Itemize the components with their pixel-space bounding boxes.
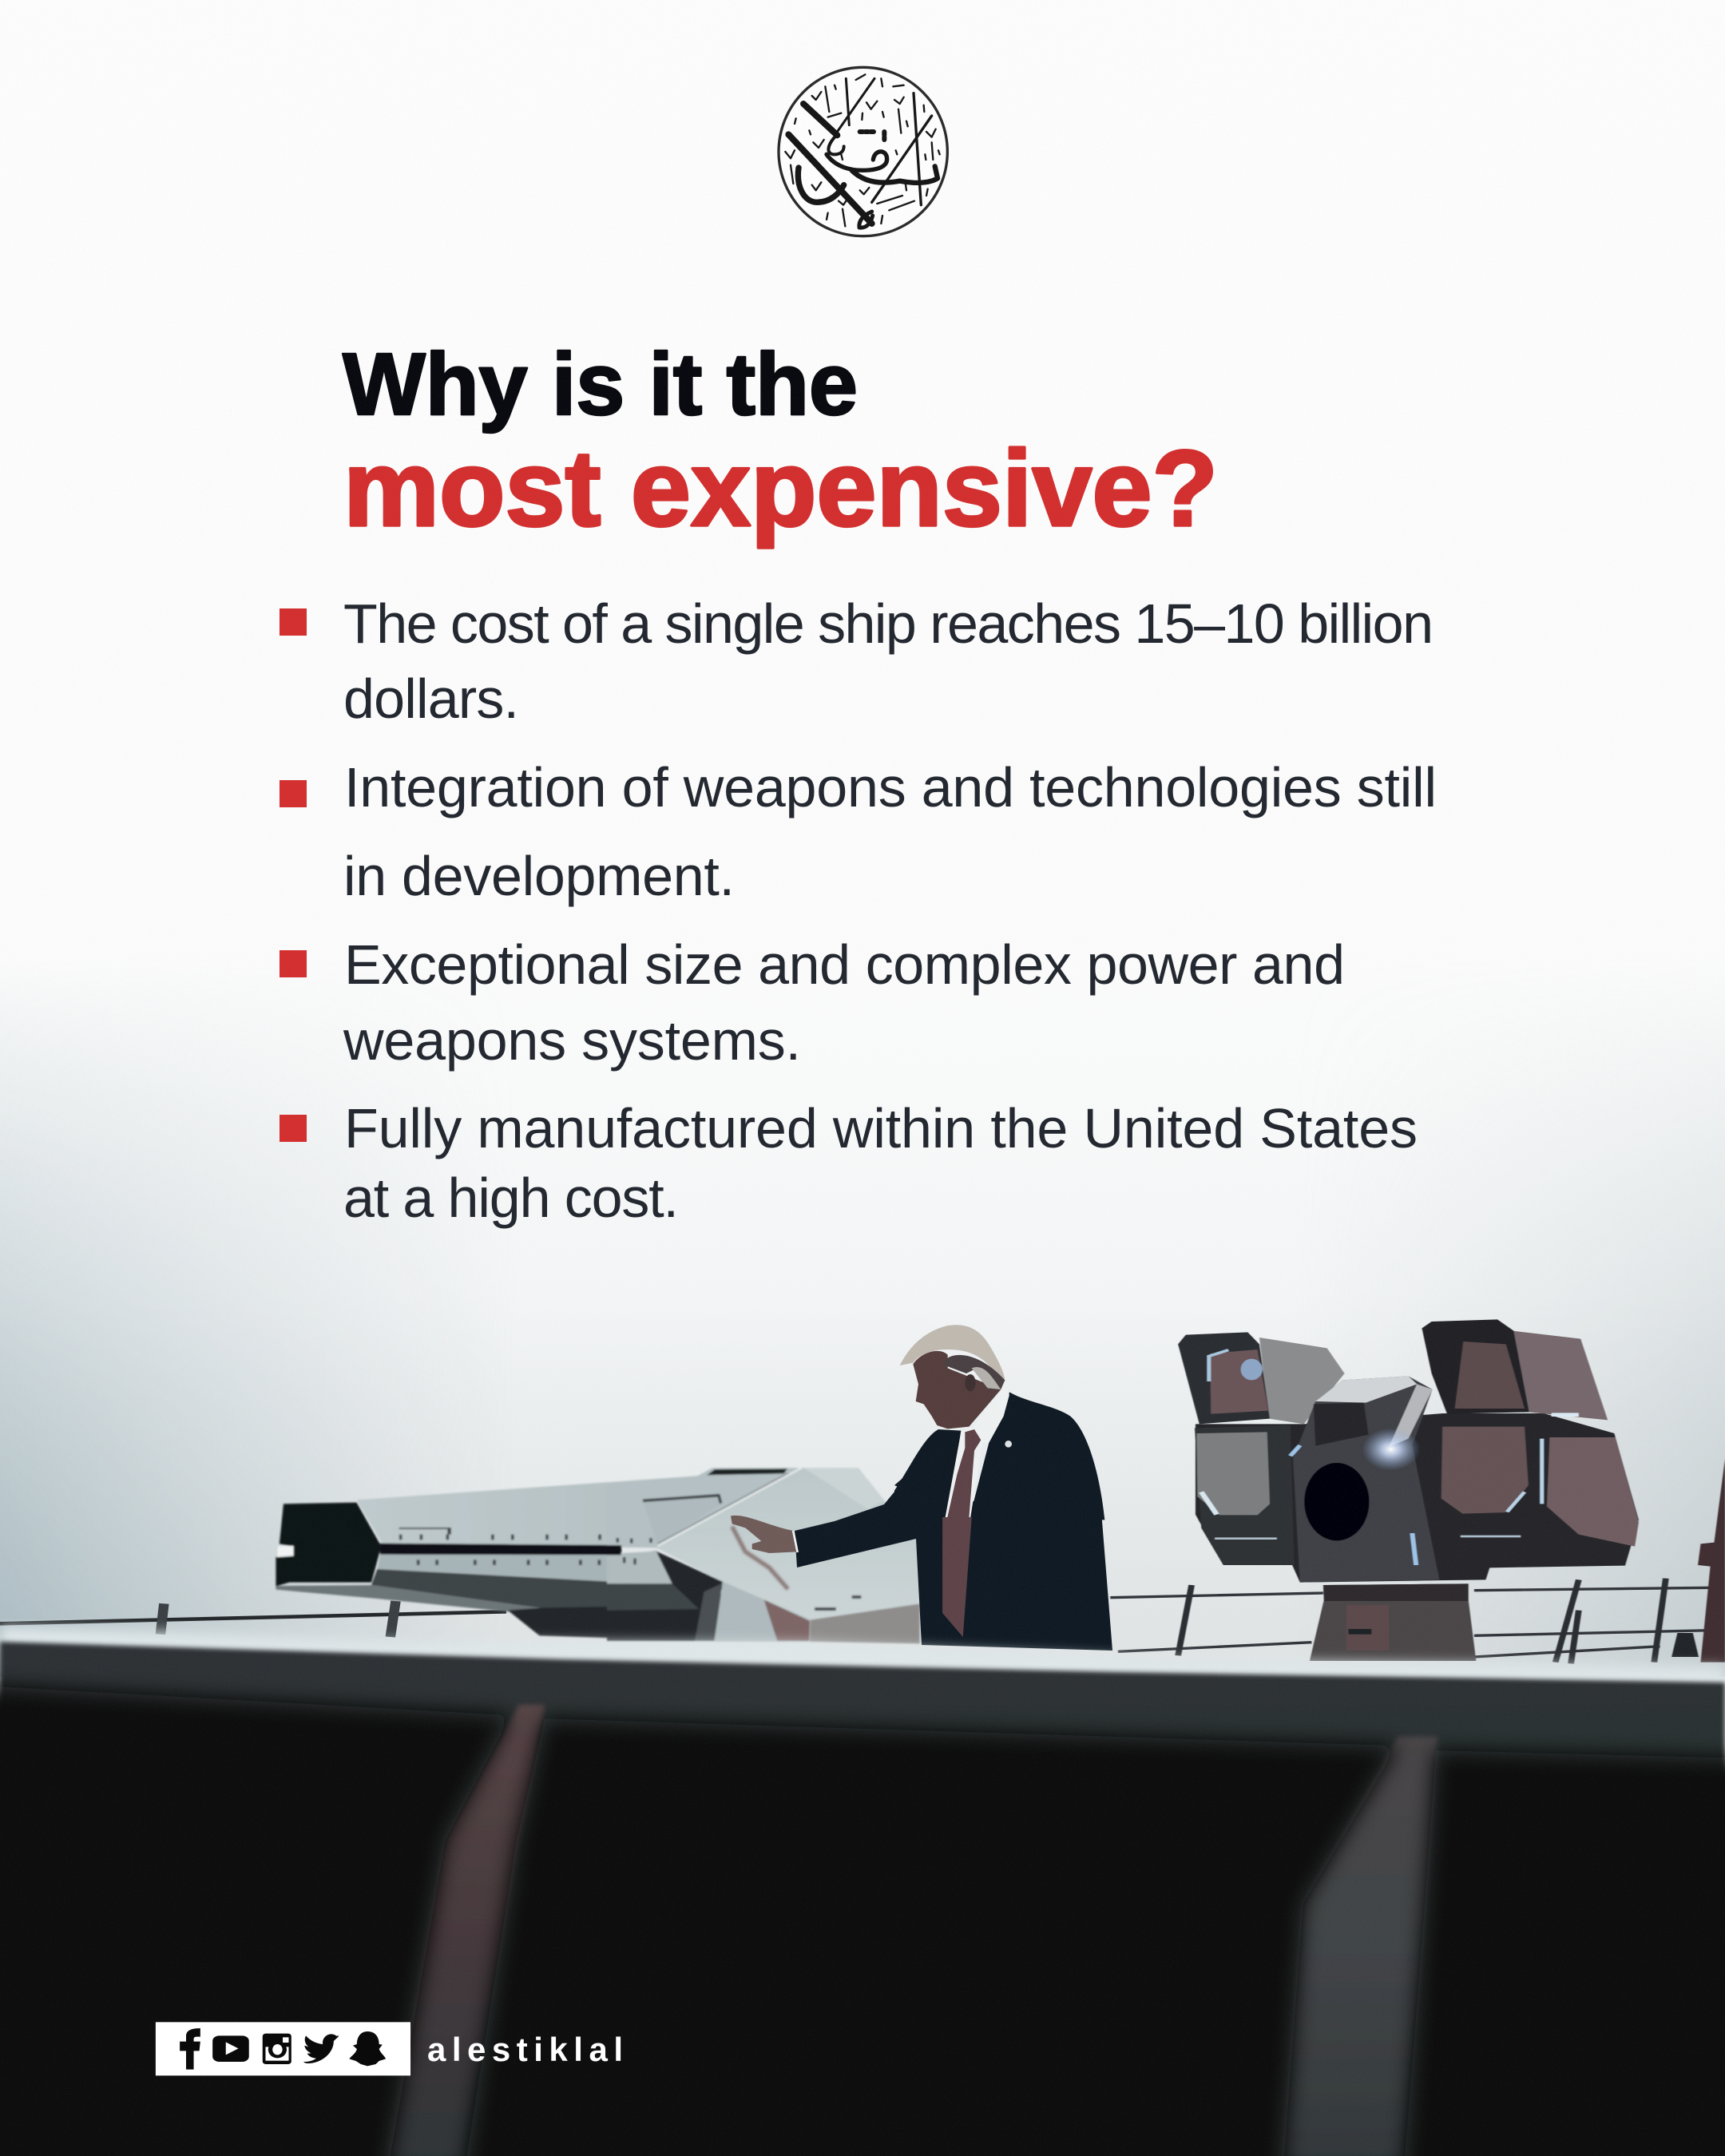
turret side hatch [643,1496,721,1544]
icon: twitter [303,2034,339,2063]
face [913,1351,1001,1429]
turret light column [714,1581,811,1642]
rails behind radar [1110,1579,1711,1663]
hand on turret [731,1516,798,1553]
heading line 1: Why is it the [343,335,858,434]
bullet 3 [280,933,1345,1072]
heading [343,335,1218,549]
ear [965,1374,976,1391]
dark body backing [1196,1413,1639,1583]
turret mid band right [607,1552,672,1584]
lens flare [1362,1428,1420,1471]
bullet list [280,593,1437,1229]
bullet 2: Integration of weapons and technologies still [344,756,1437,818]
icon: instagram [263,2034,291,2064]
bullet 3: weapons systems. [343,1009,801,1072]
bullet 1 [280,593,1434,730]
background: foggy sky [0,1023,1725,1754]
turret underside [607,1552,721,1641]
turret label plate [815,1597,861,1609]
turret black slot [380,1544,621,1555]
turret detail: rivets [399,1528,619,1565]
bullet 3: Exceptional size and complex power and [344,933,1345,996]
left hood [1178,1332,1345,1424]
lapel pin [1005,1441,1012,1448]
fog band at deck edge [0,1626,1725,1689]
shirt [945,1389,1009,1519]
bullet 4: Fully manufactured within the United States [344,1097,1418,1159]
turret upper body [357,1472,799,1548]
turret top slit [707,1468,787,1475]
sensor lens [1304,1463,1370,1540]
icon: snapchat [349,2031,386,2066]
bullet 4 [280,1097,1418,1229]
man in dark suit [731,1325,1112,1651]
central sensor head [1291,1376,1439,1583]
turret mid band [377,1551,676,1585]
footer social bar [156,2022,623,2075]
social icon box [156,2022,410,2075]
right body [1441,1427,1639,1547]
foreground deck structure [0,1642,1725,2156]
bullet 2: in development. [343,845,735,907]
bullet 1: The cost of a single ship reaches 15–10 billion [343,593,1434,655]
dark panel right [1402,1750,1725,2156]
bullet 4: at a high cost. [343,1167,679,1229]
lower jacket and sleeve [795,1469,1112,1651]
cannon turret [276,1468,920,1643]
turret top body [607,1468,803,1547]
ship railing, left [0,1601,506,1637]
turret angled panel [656,1468,920,1619]
turret lower right plate [810,1603,920,1643]
right hood [1422,1319,1608,1420]
turret dark pedestal [508,1581,726,1641]
radar sensor turret [1110,1319,1725,1663]
right edge mast [1671,1459,1725,1663]
dark panel left [0,1685,511,2156]
icon: calligraphic logo emblem [779,67,947,236]
heading line 2: most expensive? [343,428,1218,549]
icon: youtube [212,2035,249,2062]
radar pedestal [1310,1583,1476,1661]
right support post [1282,1737,1438,2156]
left support post [385,1705,545,2156]
icon: facebook [180,2028,200,2070]
lower tie [942,1517,972,1637]
handle text: alestiklal [427,2031,623,2068]
turret muzzle block [276,1503,381,1587]
left body [1195,1425,1295,1565]
upper jacket [894,1392,1104,1520]
turret lower dark band [371,1569,726,1611]
tie [947,1429,981,1519]
bullet 2 [280,756,1437,907]
hand shadow on panel [732,1527,788,1589]
deck slab [0,1642,1725,2156]
dark panel centre [462,1718,1398,2156]
bullet 1: dollars. [343,668,519,730]
hair [900,1325,1005,1389]
